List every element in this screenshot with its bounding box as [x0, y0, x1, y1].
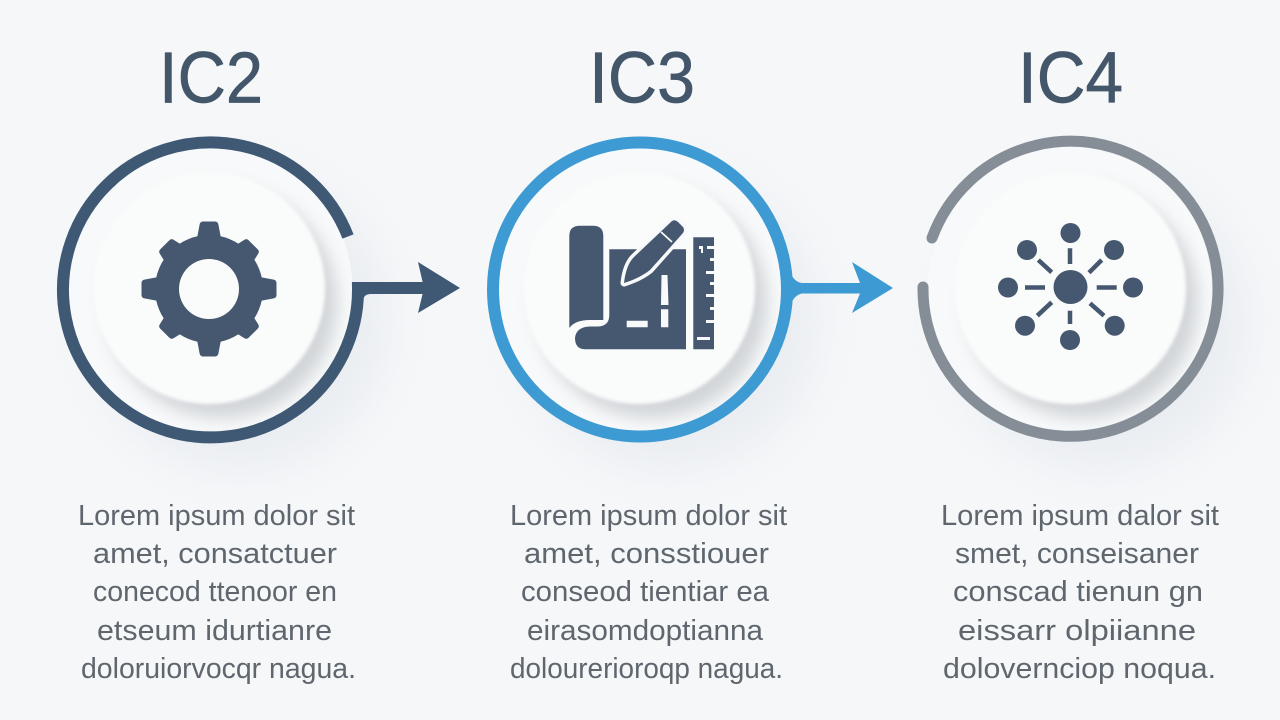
pen	[624, 220, 684, 283]
broken ring	[923, 141, 1218, 436]
description text	[510, 500, 787, 685]
sheet	[575, 249, 686, 349]
description text: smet, conseisaner	[955, 538, 1199, 570]
paper roll	[569, 226, 603, 328]
step: IC3	[493, 38, 893, 685]
disc shadow	[535, 186, 767, 418]
arrow	[790, 262, 893, 313]
disc shadow	[105, 186, 337, 418]
soft outer shadow	[955, 177, 1245, 467]
description text: conseod tientiar ea	[521, 576, 770, 608]
description text: eirasomdoptianna	[527, 615, 764, 647]
description text: doloruiorvocqr nagua.	[81, 653, 356, 685]
white disc	[954, 172, 1186, 404]
icon: network	[998, 223, 1143, 350]
description text: dolovernciop noqua.	[943, 653, 1216, 685]
arrowhead	[418, 262, 460, 313]
icon: blueprint	[569, 220, 714, 349]
description text: Lorem ipsum dolor sit	[78, 500, 355, 532]
white disc	[93, 172, 325, 404]
description text	[941, 500, 1219, 685]
soft outer shadow	[525, 177, 815, 467]
icon: gear	[142, 222, 276, 356]
description text: eissarr olpiianne	[958, 615, 1196, 647]
disc shadow	[966, 186, 1198, 418]
description text: amet, consstiouer	[524, 538, 769, 570]
sheet marks	[627, 275, 668, 327]
description text: Lorem ipsum dolor sit	[510, 500, 787, 532]
description text: conscad tienun gn	[953, 576, 1203, 608]
tail corner fillet	[363, 294, 371, 300]
disc backdrop	[928, 148, 1212, 432]
white disc	[523, 172, 755, 404]
disc backdrop	[498, 148, 782, 432]
step: IC2	[63, 38, 460, 685]
step: IC4	[923, 38, 1245, 685]
soft outer shadow	[95, 177, 385, 467]
ring with arrow tail	[63, 142, 424, 437]
ruler	[693, 237, 714, 349]
heading: IC4: IC4	[1018, 38, 1123, 118]
heading: IC2: IC2	[159, 38, 263, 118]
disc backdrop	[68, 148, 352, 432]
description text: Lorem ipsum dalor sit	[941, 500, 1219, 532]
description text: amet, consatctuer	[93, 538, 337, 570]
description text: conecod ttenoor en	[93, 576, 337, 608]
description text: etseum idurtianre	[97, 615, 332, 647]
ring	[493, 142, 787, 436]
ruler ticks	[697, 246, 714, 340]
heading: IC3: IC3	[589, 38, 695, 118]
description text	[78, 500, 356, 685]
description text: dolourerioroqp nagua.	[510, 653, 783, 685]
